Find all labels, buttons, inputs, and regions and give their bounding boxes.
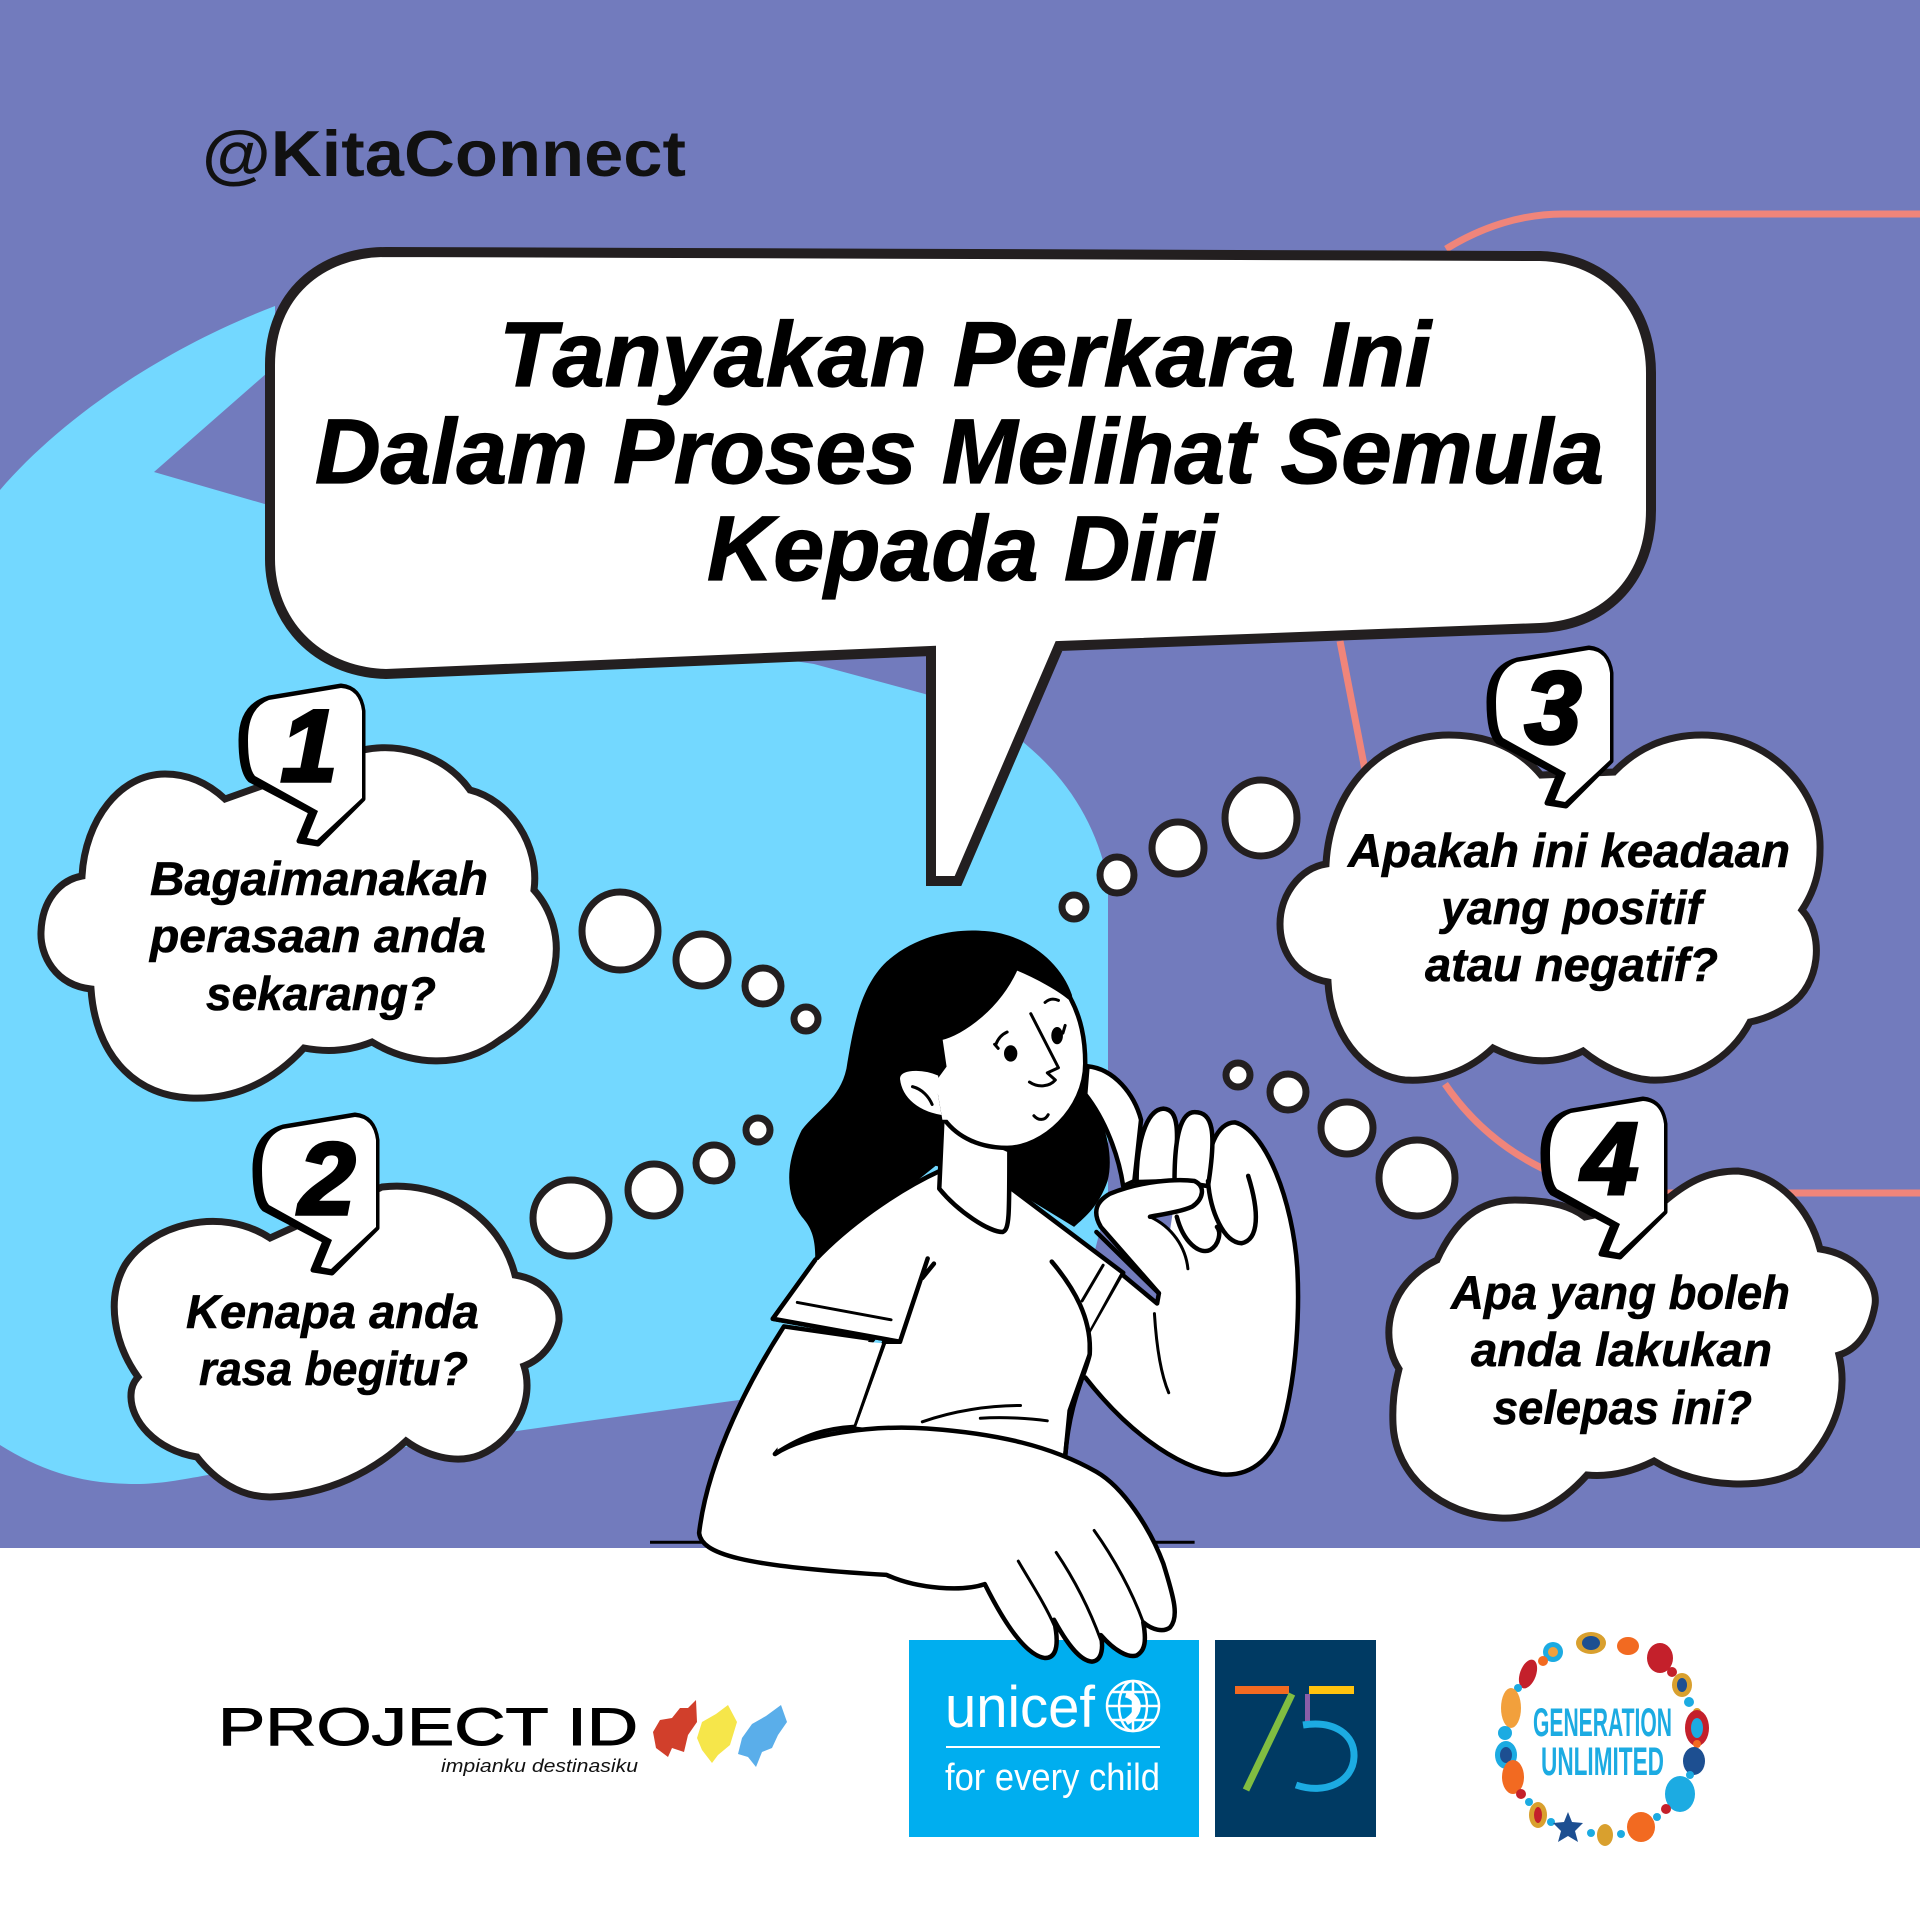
table edge: [650, 1541, 1195, 1544]
question 1 text: Bagaimanakah: [150, 852, 488, 905]
unicef strapline: for every child: [945, 1757, 1160, 1799]
badge 1: [241, 686, 363, 844]
question 1 text: perasaan anda: [148, 909, 486, 962]
hair: [789, 930, 1110, 1263]
handle: @KitaConnect: @KitaConnect: [202, 117, 686, 190]
bead ring: [1495, 1632, 1709, 1846]
brush stroke: red: [653, 1700, 697, 1757]
badge 2: 2: [297, 1122, 355, 1236]
raised arm and palm: [1085, 1122, 1298, 1475]
question 3 text: [1347, 824, 1790, 991]
logo: Generation Unlimited: UNLIMITED: [1541, 1740, 1664, 1784]
question 4 text: anda lakukan: [1471, 1323, 1772, 1376]
question 3 text: Apakah ini keadaan: [1347, 824, 1790, 877]
purple stripe by wrist: [1096, 1232, 1161, 1303]
title line 2: Dalam Proses Melihat Semula: [315, 401, 1604, 503]
question 1 text: [148, 852, 488, 1020]
neck and collar: [939, 1120, 1009, 1232]
fingers: [1137, 1109, 1256, 1251]
salmon line: top right: [1446, 214, 1920, 249]
logo: Project ID: [218, 1698, 787, 1776]
question 3 text: yang positif: [1439, 881, 1706, 934]
question 1 text: sekarang?: [206, 967, 436, 1020]
question 4 text: Apa yang boleh: [1450, 1266, 1790, 1319]
torso: [773, 1171, 1123, 1457]
unicef wordmark: unicef: [945, 1675, 1096, 1740]
badge 2: [255, 1115, 377, 1273]
title line 1: Tanyakan Perkara Ini: [499, 304, 1433, 406]
badge 4: [1543, 1099, 1665, 1257]
logo: UNICEF: [909, 1640, 1199, 1837]
badge 1: 1: [281, 689, 337, 803]
Project ID wordmark: PROJECT ID: [218, 1698, 638, 1757]
cloud: question 4: [1389, 1099, 1875, 1518]
question 2 text: rasa begitu?: [199, 1342, 468, 1395]
unicef emblem: [1107, 1681, 1159, 1731]
white footer band: [0, 1548, 1920, 1920]
thought dots: to question 4: [1226, 1063, 1455, 1216]
thumb: [1096, 1180, 1202, 1293]
girl illustration: [650, 930, 1298, 1662]
logo: Generation Unlimited: [1495, 1632, 1709, 1846]
thought dots: to question 1: [582, 892, 818, 1031]
cloud: question 2: [114, 1115, 559, 1497]
question 2 text: [186, 1285, 479, 1395]
badge 4: 4: [1580, 1102, 1638, 1216]
Generation Unlimited wordmark: GENERATION: [1533, 1701, 1672, 1745]
facial features: [1004, 1045, 1017, 1062]
salmon line: middle right: [1340, 641, 1920, 1193]
title line 3: Kepada Diri: [707, 498, 1219, 600]
sleeve and shirt details: [773, 1258, 1103, 1457]
head: [898, 968, 1085, 1232]
main speech bubble: [270, 252, 1651, 881]
thought dots: to question 3: [1062, 780, 1297, 919]
brush stroke: blue: [738, 1705, 787, 1767]
cloud: question 3: [1280, 648, 1820, 1080]
question 2 text: Kenapa anda: [186, 1285, 479, 1338]
light blue speech shape background: [0, 306, 1108, 1484]
leaning forearm and hand: [699, 1326, 1175, 1662]
logo: 75 years: [1215, 1640, 1376, 1837]
Project ID tagline: impianku destinasiku: [441, 1756, 638, 1776]
badge 3: [1489, 648, 1611, 806]
ear: [898, 1069, 946, 1118]
question 4 text: selepas ini?: [1493, 1381, 1752, 1434]
thought dots: to question 2: [533, 1118, 770, 1256]
question 4 text: [1450, 1266, 1790, 1434]
cloud: question 1: [41, 686, 556, 1098]
face: [940, 968, 1085, 1148]
question 3 text: atau negatif?: [1425, 938, 1718, 991]
brush stroke: yellow: [697, 1705, 737, 1763]
finger behind cheek: [1085, 1066, 1141, 1186]
badge 3: 3: [1525, 651, 1581, 765]
